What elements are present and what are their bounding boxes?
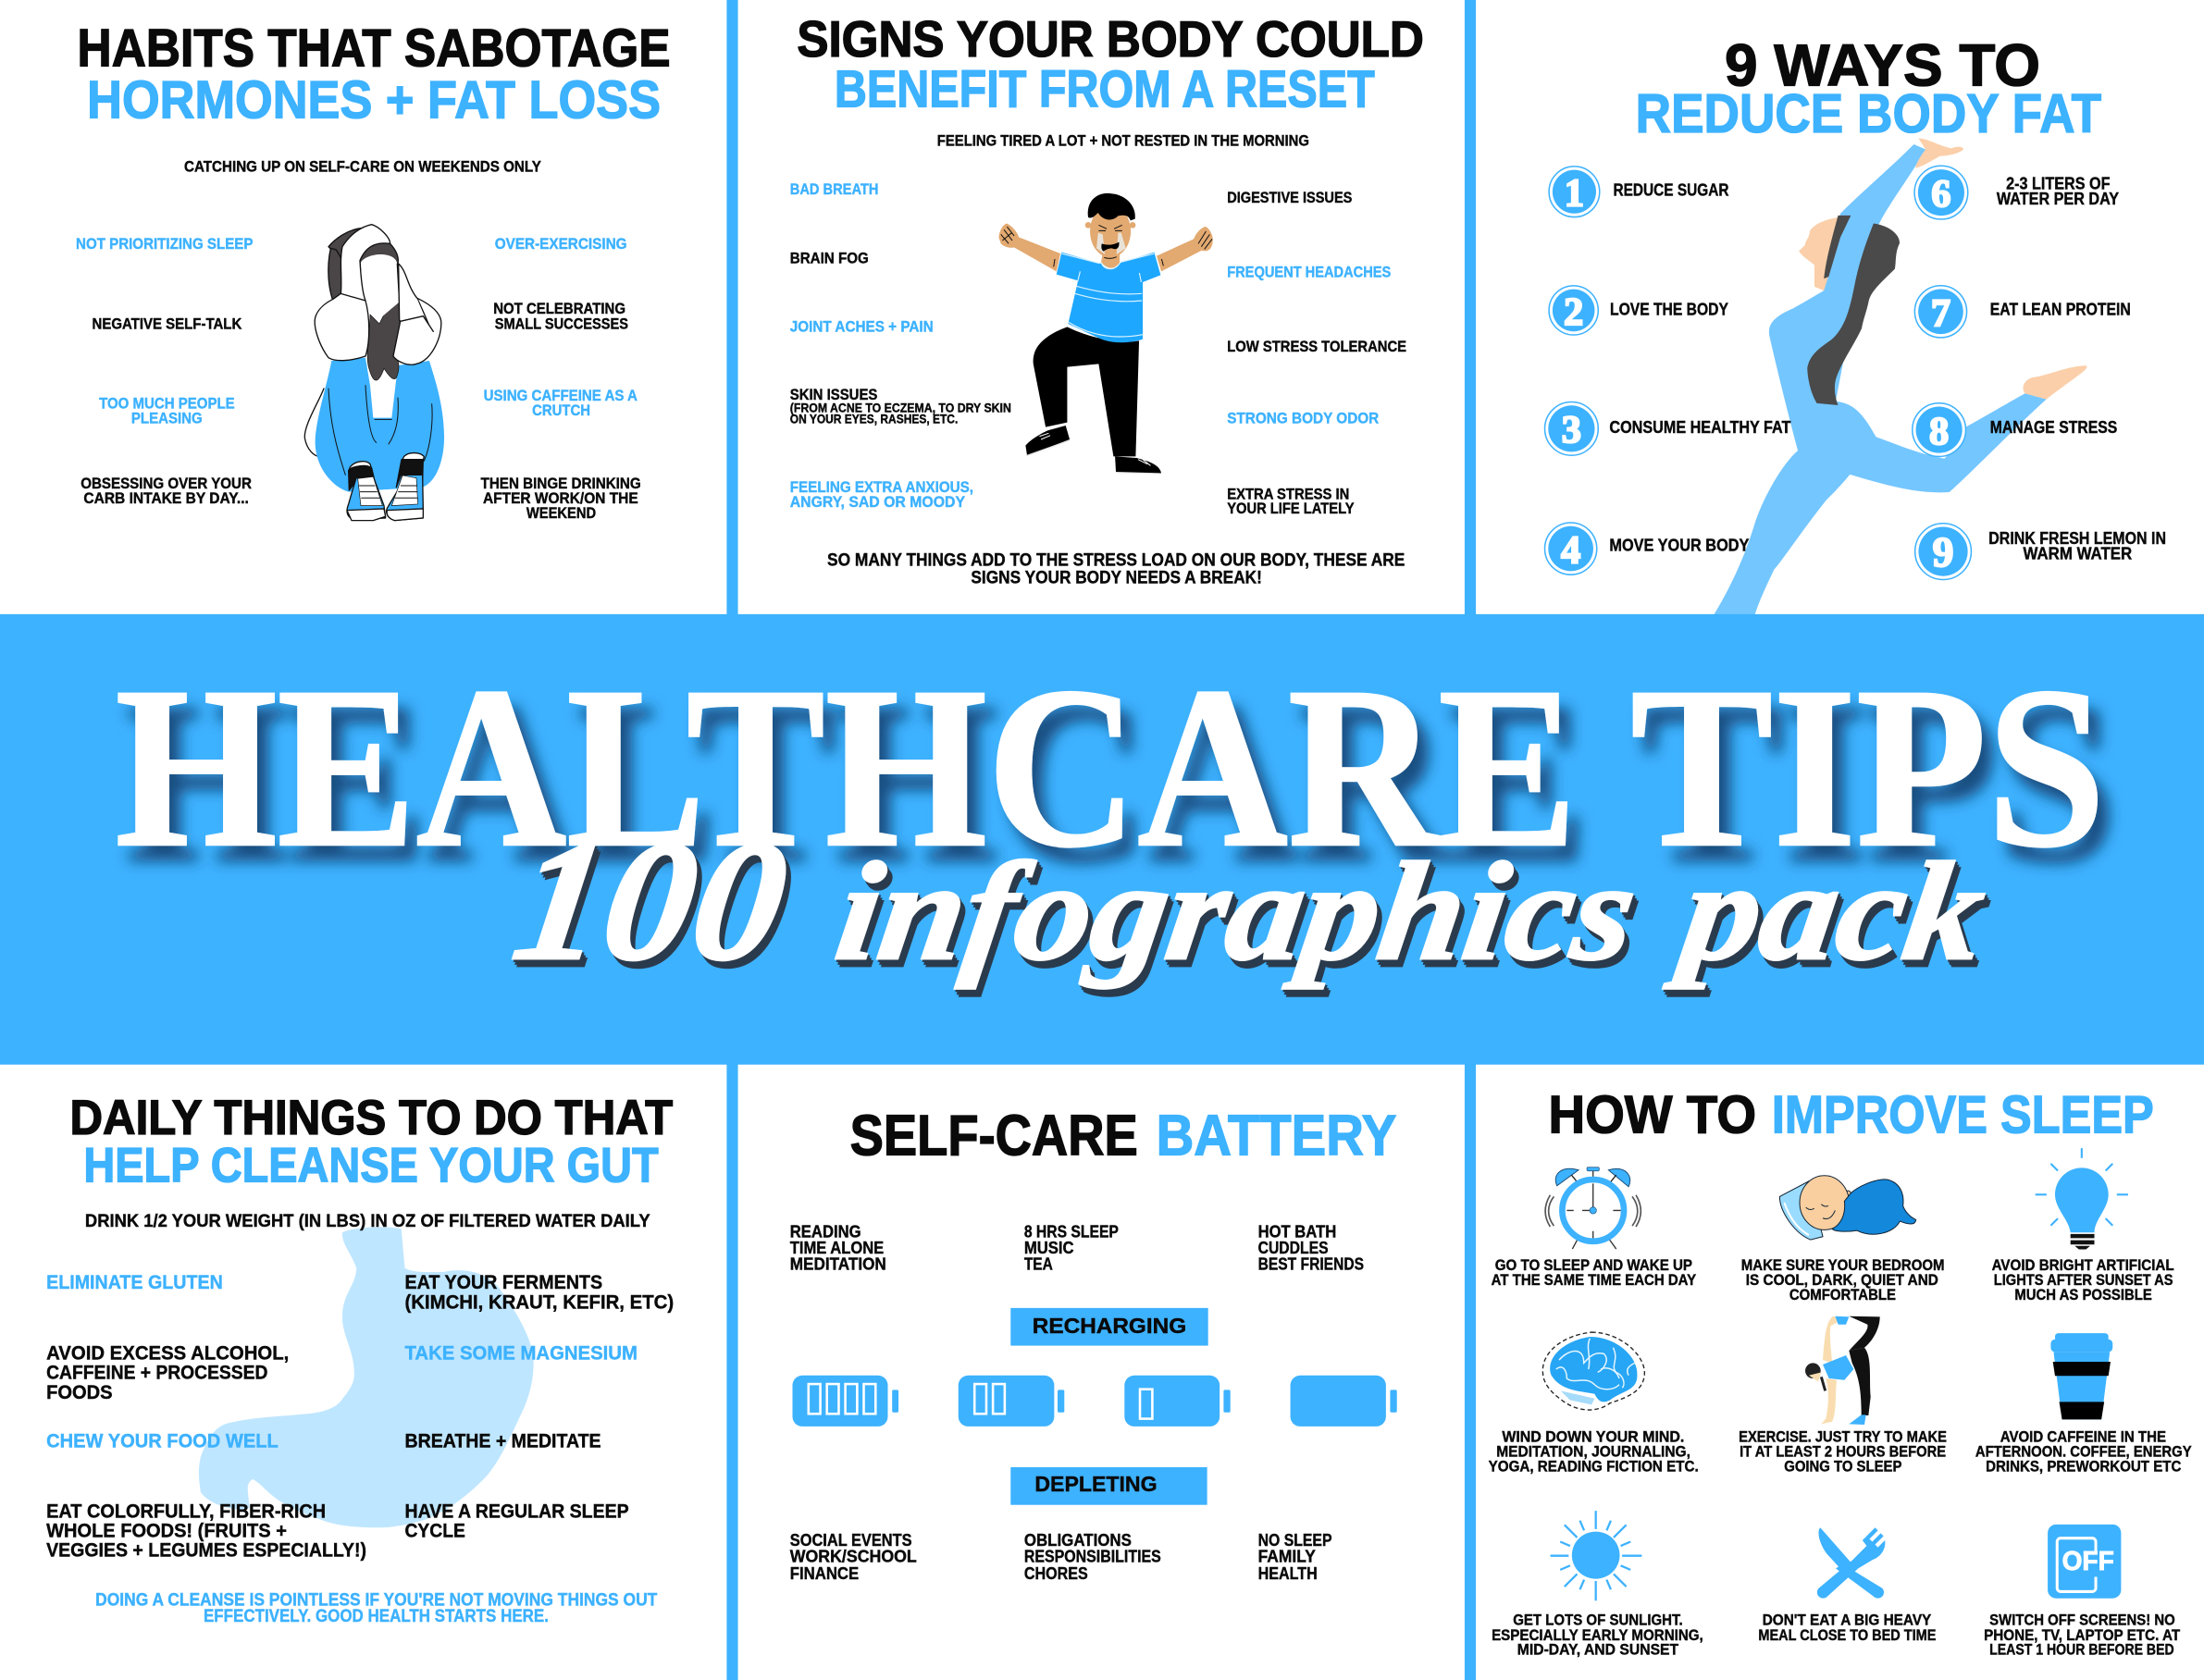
icon: yoga standing split	[1805, 1316, 1880, 1425]
panel: 9 ways to reduce body fat	[1545, 32, 2166, 617]
list: depleting column 1: WORK/SCHOOL	[790, 1548, 917, 1566]
item: regular sleep cycle: HAVE A REGULAR SLEEP	[405, 1501, 629, 1523]
text: catching up on self-care: CATCHING UP ON SELF-CARE ON WEEKENDS ONLY	[184, 157, 541, 175]
item: skin issues: SKIN ISSUES	[790, 386, 877, 403]
tip: bedroom: IS COOL, DARK, QUIET AND	[1746, 1271, 1938, 1289]
text: closing note on cleansing: EFFECTIVELY. GOOD HEALTH STARTS HERE.	[204, 1607, 549, 1626]
tip: bedroom: COMFORTABLE	[1789, 1286, 1896, 1303]
heading: self-care battery: BATTERY	[1157, 1105, 1396, 1168]
item: eat lean protein: EAT LEAN PROTEIN	[1990, 300, 2131, 318]
item: too much people pleasing: TOO MUCH PEOPLE	[99, 394, 235, 412]
list: recharging column 2: TEA	[1024, 1255, 1053, 1274]
badge: 3	[1545, 401, 1598, 455]
text: closing note on cleansing: DOING A CLEANSE IS POINTLESS IF YOU'RE NOT MOVING THINGS OUT	[95, 1590, 658, 1610]
text: drink water: DRINK 1/2 YOUR WEIGHT (IN LBS) IN OZ OF FILTERED WATER DAILY	[85, 1211, 650, 1231]
item: regular sleep cycle	[405, 1501, 629, 1541]
tip: same wake time: AT THE SAME TIME EACH DAY	[1492, 1271, 1696, 1289]
tip: sunlight: MID-DAY, AND SUNSET	[1517, 1640, 1679, 1658]
panel: habits that sabotage hormones and fat loss	[76, 19, 671, 522]
item: not celebrating small successes	[493, 300, 628, 332]
panel: signs your body could benefit from a reset	[790, 10, 1424, 587]
list: depleting column 2	[1024, 1531, 1161, 1583]
illustration: frustrated boy with raised arms	[998, 193, 1213, 474]
item: eat colorfully	[46, 1501, 366, 1562]
list: recharging column 1: READING	[790, 1223, 861, 1241]
item: skin issues: (FROM ACNE TO ECZEMA, TO DRY SKIN	[790, 401, 1011, 415]
badge: 4	[1545, 523, 1597, 574]
subtitle: 100 infographics pack: pack	[1663, 834, 1994, 990]
item: then binge drinking: WEEKEND	[526, 504, 596, 522]
item: then binge drinking: THEN BINGE DRINKING	[481, 475, 641, 492]
item: not prioritizing sleep: NOT PRIORITIZING SLEEP	[76, 235, 253, 253]
list: recharging column 2: 8 HRS SLEEP	[1024, 1223, 1119, 1241]
badge: 8: 8	[1929, 410, 1949, 453]
item: too much people pleasing	[99, 394, 235, 426]
badge: 2	[1549, 286, 1598, 335]
label: recharging	[1010, 1308, 1208, 1346]
illustration: stomach silhouette	[199, 1227, 534, 1527]
icon: low battery	[1124, 1376, 1231, 1427]
item: move your body: MOVE YOUR BODY	[1609, 537, 1749, 555]
badge: 2: 2	[1564, 290, 1583, 334]
item: feeling extra anxious: FEELING EXTRA ANXIOUS,	[790, 478, 973, 496]
tip: same wake time	[1492, 1256, 1696, 1289]
tip: wind down: YOGA, READING FICTION ETC.	[1489, 1458, 1699, 1476]
banner: healthcare tips	[0, 614, 2204, 1065]
heading: how to improve sleep	[1548, 1085, 2154, 1144]
item: using caffeine as a crutch: USING CAFFEINE AS A	[484, 387, 638, 404]
item: avoid excess alcohol: CAFFEINE + PROCESSED	[46, 1362, 267, 1384]
item: 2-3 liters of water: WATER PER DAY	[1997, 190, 2119, 208]
tip: switch off screens: PHONE, TV, LAPTOP ETC. AT	[1984, 1626, 2181, 1644]
item: feeling extra anxious	[790, 478, 973, 511]
subtitle: 100 infographics pack: 100	[503, 807, 798, 996]
tip: sunlight: GET LOTS OF SUNLIGHT.	[1513, 1612, 1683, 1629]
item: then binge drinking	[481, 475, 641, 522]
item: avoid excess alcohol: FOODS	[46, 1381, 113, 1403]
list: recharging column 3: HOT BATH	[1258, 1223, 1336, 1241]
item: manage stress: MANAGE STRESS	[1990, 418, 2117, 437]
heading: signs your body: SIGNS YOUR BODY COULD	[797, 10, 1424, 68]
item: joint aches and pain: JOINT ACHES + PAIN	[790, 318, 934, 336]
icon: coffee cup	[2050, 1333, 2112, 1419]
list: recharging column 1: MEDITATION	[790, 1255, 886, 1274]
badge: 8	[1913, 403, 1966, 456]
panel: self-care battery	[790, 1105, 1397, 1583]
illustration: woman sitting holding her head	[304, 225, 444, 521]
list: depleting column 1	[790, 1531, 917, 1583]
text: closing note on stress load	[827, 550, 1405, 587]
tip: bedroom: MAKE SURE YOUR BEDROOM	[1741, 1256, 1945, 1274]
item: not celebrating small successes: SMALL SUCCESSES	[495, 315, 628, 332]
tip: heavy meal	[1758, 1612, 1936, 1644]
list: depleting column 3: HEALTH	[1258, 1564, 1318, 1583]
item: drink lemon water: DRINK FRESH LEMON IN	[1988, 529, 2166, 548]
tip: avoid caffeine	[1975, 1428, 2192, 1476]
heading: habits that sabotage	[78, 19, 671, 130]
heading: daily things	[70, 1091, 673, 1193]
heading: 9 ways: REDUCE BODY FAT	[1636, 82, 2101, 144]
icon: alarm clock	[1545, 1167, 1641, 1249]
label: recharging: RECHARGING	[1033, 1314, 1186, 1338]
item: then binge drinking: AFTER WORK/ON THE	[483, 489, 638, 507]
item: eat colorfully: WHOLE FOODS! (FRUITS +	[46, 1519, 287, 1541]
tip: avoid caffeine: AVOID CAFFEINE IN THE	[2000, 1428, 2166, 1446]
item: drink lemon water	[1988, 529, 2166, 563]
text: closing note on stress load: SO MANY THINGS ADD TO THE STRESS LOAD ON OUR BODY, THESE ARE	[827, 550, 1405, 570]
item: frequent headaches: FREQUENT HEADACHES	[1227, 263, 1391, 280]
list: depleting column 1: FINANCE	[790, 1564, 859, 1583]
heading: how to improve sleep: IMPROVE SLEEP	[1772, 1085, 2154, 1144]
heading: how to improve sleep: HOW TO	[1548, 1085, 1756, 1144]
tip: avoid bright light: MUCH AS POSSIBLE	[2014, 1286, 2152, 1303]
item: extra stress	[1227, 486, 1355, 517]
list: recharging column 3: CUDDLES	[1258, 1239, 1329, 1257]
list: recharging column 3	[1258, 1223, 1364, 1274]
item: regular sleep cycle: CYCLE	[405, 1519, 465, 1541]
item: skin issues: ON YOUR EYES, RASHES, ETC.	[790, 413, 958, 426]
item: obsessing over carb intake: CARB INTAKE BY DAY...	[83, 489, 249, 507]
badge: 1	[1549, 167, 1600, 217]
subtitle: 100 infographics pack: infographics	[828, 834, 1645, 990]
tip: avoid bright light: AVOID BRIGHT ARTIFICIAL	[1992, 1256, 2174, 1274]
badge: 6	[1914, 166, 1968, 219]
item: breathe and meditate: BREATHE + MEDITATE	[405, 1430, 601, 1452]
item: chew your food well: CHEW YOUR FOOD WELL	[46, 1430, 279, 1452]
item: extra stress: EXTRA STRESS IN	[1227, 486, 1349, 503]
tip: avoid caffeine: DRINKS, PREWORKOUT ETC	[1986, 1458, 2181, 1476]
tip: switch off screens: LEAST 1 HOUR BEFORE BED	[1989, 1640, 2174, 1658]
badge: 7	[1914, 286, 1967, 338]
tip: wind down	[1489, 1428, 1699, 1476]
item: bad breath: BAD BREATH	[790, 180, 878, 198]
heading: signs your body: BENEFIT FROM A RESET	[835, 59, 1375, 117]
item: eat colorfully: VEGGIES + LEGUMES ESPECIALLY!)	[46, 1539, 366, 1562]
item: eat your ferments: (KIMCHI, KRAUT, KEFIR, ETC)	[405, 1291, 674, 1313]
list: depleting column 3: FAMILY	[1258, 1548, 1316, 1566]
item: avoid excess alcohol	[46, 1341, 289, 1403]
tip: same wake time: GO TO SLEEP AND WAKE UP	[1495, 1256, 1692, 1274]
tip: exercise: GOING TO SLEEP	[1784, 1458, 1901, 1476]
item: take some magnesium: TAKE SOME MAGNESIUM	[405, 1341, 638, 1364]
tip: avoid bright light	[1992, 1256, 2174, 1303]
badge: 1: 1	[1565, 172, 1584, 216]
list: depleting column 3: NO SLEEP	[1258, 1531, 1332, 1550]
icon: brain	[1542, 1332, 1644, 1410]
heading: daily things: DAILY THINGS TO DO THAT	[70, 1091, 673, 1145]
item: too much people pleasing: PLEASING	[131, 409, 203, 426]
tip: heavy meal: MEAL CLOSE TO BED TIME	[1758, 1626, 1936, 1644]
item: drink lemon water: WARM WATER	[2023, 545, 2132, 563]
title: healthcare tips: HEALTHCARE	[116, 639, 1577, 895]
badge: 6: 6	[1931, 172, 1951, 216]
tip: avoid bright light: LIGHTS AFTER SUNSET AS	[1994, 1271, 2173, 1289]
label: depleting: DEPLETING	[1034, 1472, 1158, 1496]
item: 2-3 liters of water	[1997, 174, 2119, 208]
item: eat your ferments: EAT YOUR FERMENTS	[405, 1271, 602, 1293]
tip: switch off screens	[1984, 1612, 2181, 1658]
panel: how to improve sleep	[1489, 1085, 2192, 1658]
text: closing note on stress load: SIGNS YOUR BODY NEEDS A BREAK!	[971, 568, 1262, 587]
icon: phone off	[2048, 1525, 2121, 1599]
item: reduce sugar: REDUCE SUGAR	[1614, 180, 1729, 199]
heading: daily things: HELP CLEANSE YOUR GUT	[83, 1139, 659, 1193]
item: digestive issues: DIGESTIVE ISSUES	[1227, 189, 1352, 206]
tip: wind down: MEDITATION, JOURNALING,	[1496, 1443, 1690, 1461]
list: depleting column 2: CHORES	[1024, 1564, 1088, 1583]
heading: signs your body	[797, 10, 1424, 117]
icon: phone off: OFF	[2062, 1547, 2114, 1576]
illustration: leaping dancer	[1713, 139, 2086, 617]
item: low stress tolerance: LOW STRESS TOLERANCE	[1227, 338, 1406, 355]
list: depleting column 2: RESPONSIBILITIES	[1024, 1548, 1161, 1566]
item: using caffeine as a crutch: CRUTCH	[532, 401, 590, 419]
heading: 9 ways: 9 WAYS TO	[1725, 32, 2040, 99]
tip: sunlight	[1492, 1612, 1703, 1658]
item: brain fog: BRAIN FOG	[790, 250, 869, 267]
badge: 7: 7	[1931, 291, 1950, 335]
icon: empty battery	[1291, 1376, 1397, 1427]
list: recharging column 1	[790, 1223, 886, 1274]
item: consume healthy fat: CONSUME HEALTHY FAT	[1609, 418, 1790, 437]
item: over-exercising: OVER-EXERCISING	[495, 235, 627, 253]
icon: full battery	[792, 1376, 898, 1427]
tip: bedroom	[1741, 1256, 1945, 1303]
tip: sunlight: ESPECIALLY EARLY MORNING,	[1492, 1626, 1703, 1644]
heading: 9 ways	[1636, 32, 2101, 144]
label: depleting	[1010, 1467, 1207, 1505]
item: skin issues	[790, 386, 1011, 426]
item: avoid excess alcohol: AVOID EXCESS ALCOHOL,	[46, 1341, 289, 1364]
list: recharging column 3: BEST FRIENDS	[1258, 1255, 1364, 1274]
item: eliminate gluten: ELIMINATE GLUTEN	[46, 1271, 223, 1293]
list: depleting column 1: SOCIAL EVENTS	[790, 1531, 912, 1550]
icon: light bulb	[2036, 1148, 2128, 1250]
tip: exercise: IT AT LEAST 2 HOURS BEFORE	[1740, 1443, 1946, 1461]
list: recharging column 2: MUSIC	[1024, 1239, 1074, 1257]
title: healthcare tips: TIPS	[1630, 639, 2106, 895]
item: strong body odor: STRONG BODY ODOR	[1227, 410, 1379, 427]
item: using caffeine as a crutch	[484, 387, 638, 419]
item: love the body: LOVE THE BODY	[1610, 300, 1728, 318]
icon: sleeping baby	[1779, 1176, 1916, 1240]
tip: wind down: WIND DOWN YOUR MIND.	[1502, 1428, 1684, 1446]
subtitle: 100 infographics pack	[503, 807, 1994, 996]
heading: self-care battery: SELF-CARE	[850, 1105, 1138, 1168]
item: obsessing over carb intake	[80, 475, 252, 507]
tip: heavy meal: DON'T EAT A BIG HEAVY	[1763, 1612, 1931, 1629]
list: recharging column 1: TIME ALONE	[790, 1239, 884, 1257]
item: not celebrating small successes: NOT CELEBRATING	[493, 300, 625, 317]
list: depleting column 3	[1258, 1531, 1332, 1583]
icon: sun	[1551, 1511, 1641, 1600]
item: eat colorfully: EAT COLORFULLY, FIBER-RICH	[46, 1501, 326, 1523]
list: recharging column 2	[1024, 1223, 1119, 1274]
badge: 9	[1915, 524, 1971, 580]
tip: exercise: EXERCISE. JUST TRY TO MAKE	[1739, 1428, 1947, 1446]
heading: habits that sabotage: HABITS THAT SABOTAGE	[78, 19, 671, 78]
list: depleting column 2: OBLIGATIONS	[1024, 1531, 1132, 1550]
item: negative self-talk: NEGATIVE SELF-TALK	[93, 315, 241, 332]
item: 2-3 liters of water: 2-3 LITERS OF	[2006, 174, 2111, 192]
item: extra stress: YOUR LIFE LATELY	[1227, 500, 1355, 517]
text: feeling tired: FEELING TIRED A LOT + NOT RESTED IN THE MORNING	[937, 132, 1309, 150]
tip: switch off screens: SWITCH OFF SCREENS! NO	[1989, 1612, 2175, 1629]
panel: daily things to cleanse your gut	[46, 1091, 674, 1626]
badge: 4: 4	[1561, 528, 1580, 572]
icon: half battery	[959, 1376, 1064, 1427]
heading: habits that sabotage: HORMONES + FAT LOSS	[87, 71, 661, 130]
badge: 9: 9	[1933, 528, 1953, 575]
tip: exercise	[1739, 1428, 1947, 1476]
badge: 3: 3	[1562, 409, 1581, 452]
item: eat your ferments	[405, 1271, 674, 1313]
icon: knife and fork	[1817, 1527, 1885, 1599]
heading: self-care battery	[850, 1105, 1396, 1168]
text: closing note on cleansing	[95, 1590, 658, 1626]
item: feeling extra anxious: ANGRY, SAD OR MOODY	[790, 493, 965, 511]
item: obsessing over carb intake: OBSESSING OVER YOUR	[80, 475, 252, 492]
